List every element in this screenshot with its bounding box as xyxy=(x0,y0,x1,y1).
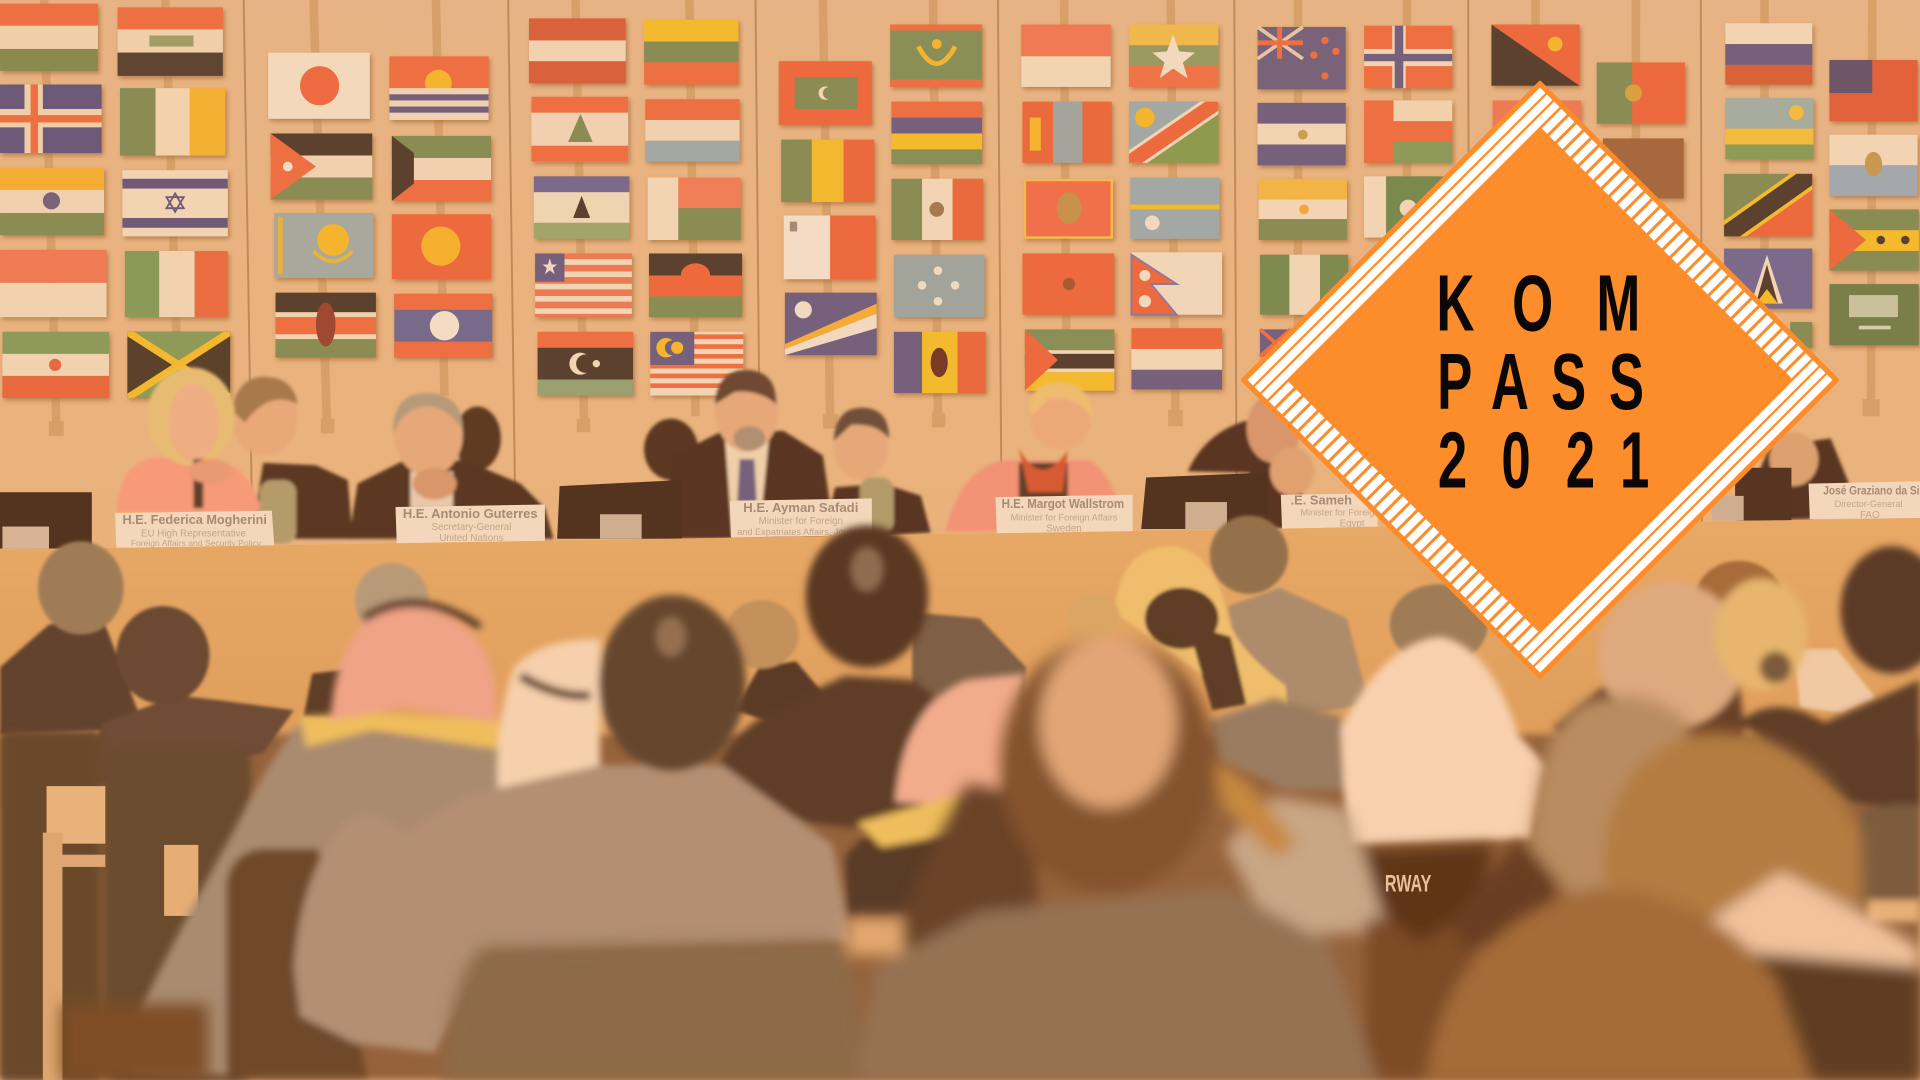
title line: KOM: KOM xyxy=(1436,260,1640,348)
flag: Iran xyxy=(2,332,109,398)
flag: Latvia style xyxy=(529,18,626,83)
panelist: Federica Mogherini xyxy=(116,367,262,512)
flag: Russia style xyxy=(1725,23,1812,84)
nameplate: Jose Graziano da Silva: Director-General xyxy=(1835,499,1902,509)
flag: Mongolia xyxy=(1022,102,1112,163)
flag: Israel xyxy=(122,170,228,236)
badge: KOMPASS 2021 diamond xyxy=(1240,80,1840,680)
flag: New Zealand xyxy=(1258,27,1346,89)
attendee: grey hair covered man xyxy=(1390,584,1488,665)
attendee: dark coat xyxy=(1751,953,1920,1080)
flag: Portugal xyxy=(1597,62,1685,124)
flag: Italy xyxy=(125,251,228,317)
flag: Iceland xyxy=(0,84,102,153)
flag: Marshall Islands xyxy=(785,293,877,355)
nameplate: Antonio Guterres: Secretary-General xyxy=(431,522,511,533)
attendee: red-brown hair xyxy=(1604,732,1864,918)
nameplate: Margot Wallstrom: Sweden xyxy=(1046,523,1082,534)
attendee: white robed figure xyxy=(1341,637,1545,845)
attendee: sweater back xyxy=(1206,698,1353,790)
flag: Japan xyxy=(268,53,370,119)
monitor left xyxy=(0,492,92,549)
attendee: long brown hair xyxy=(1212,759,1298,857)
flag: Kyrgyzstan xyxy=(392,214,491,279)
nameplate: Antonio Guterres: United Nations xyxy=(439,533,504,544)
attendee: second keffiyeh xyxy=(895,673,1026,808)
long stripes south-east side xyxy=(1520,360,1832,672)
monitor right xyxy=(1141,473,1267,529)
flag: Papua New Guinea xyxy=(1491,24,1580,86)
flag: Saudi Arabia xyxy=(1829,284,1919,345)
flag: Morocco xyxy=(1022,253,1114,315)
flag: Moldova xyxy=(894,332,986,393)
attendee: Norway sign xyxy=(1363,845,1494,943)
attendee: blurred foreground head xyxy=(1427,888,1812,1080)
long stripes north-west side xyxy=(1248,88,1560,400)
badge title xyxy=(1436,260,1649,505)
nameplate: Federica Mogherini xyxy=(115,511,274,549)
panelist: woman behind Safadi xyxy=(644,419,698,480)
flag: Micronesia xyxy=(894,255,984,317)
chair left xyxy=(0,731,100,1080)
attendee: white collar xyxy=(1708,872,1920,970)
flag: Kazakhstan xyxy=(274,213,373,278)
attendee: dark suit centre xyxy=(714,525,961,833)
attendee: bald man in foreground xyxy=(857,637,1378,1080)
flag: Nepal xyxy=(1131,252,1222,315)
water pitchers xyxy=(260,478,894,544)
flag: Monaco xyxy=(1021,24,1111,87)
audience: seat backs xyxy=(0,731,251,1080)
nameplate: Ayman Safadi: and Expatriates Affairs, Jordan xyxy=(737,527,862,537)
flag: Kiribati xyxy=(389,56,489,120)
computer monitors xyxy=(0,468,1791,549)
attendee: woman with hair clip xyxy=(1145,588,1247,710)
lower background behind audience xyxy=(0,735,1920,1080)
flag: Madagascar xyxy=(648,178,741,240)
attendee: small blonde left xyxy=(1067,594,1120,643)
attendee: grey robe with keffiyeh xyxy=(116,713,500,1075)
flag: Libya xyxy=(538,332,633,396)
flag: Maldives xyxy=(779,61,872,125)
flags wall xyxy=(0,4,1919,398)
attendee: dark hair left of bald man xyxy=(888,784,1041,949)
dark gap right of bald man xyxy=(1365,918,1476,1080)
hatch stripes south-west side xyxy=(1279,392,1530,643)
flag: India xyxy=(0,168,104,235)
attendee: man in tan jacket xyxy=(294,595,851,1053)
flag: Laos xyxy=(394,294,492,358)
flag: Mozambique xyxy=(1025,329,1114,391)
flag: Nigeria xyxy=(1260,255,1348,315)
flag: Indonesia xyxy=(0,250,107,317)
title line: PASS: PASS xyxy=(1437,338,1644,427)
attendee: striped suit xyxy=(73,606,294,784)
flag: Lebanon xyxy=(531,97,628,162)
audience: far row xyxy=(0,516,1876,784)
flag: Lesotho xyxy=(534,176,629,239)
attendee: white headdress xyxy=(497,639,600,802)
flag: partial Union design xyxy=(1260,329,1291,356)
attendee: striped white shirt far right xyxy=(1794,649,1876,713)
flag: Qatar xyxy=(1603,138,1684,198)
chair second xyxy=(104,749,251,1080)
flag: Niger xyxy=(1259,179,1347,240)
nameplate: Sameh Shoukry: Minister for Foreign xyxy=(1300,508,1379,518)
flag: Luxembourg xyxy=(645,99,740,162)
attendee: red checked keffiyeh xyxy=(331,604,497,722)
right seat back xyxy=(1855,804,1920,900)
panelist: man with glasses xyxy=(231,377,353,539)
panelist: aide behind Guterres xyxy=(454,407,501,470)
flag: Malawi xyxy=(649,253,742,317)
flag: Malta xyxy=(784,216,876,279)
flag: Saint Lucia xyxy=(1724,249,1812,309)
badge inner orange field xyxy=(1287,127,1793,633)
nameplate: Margot Wallstrom xyxy=(996,495,1133,534)
right desk edge xyxy=(1867,900,1920,922)
flag: Mauritius xyxy=(891,102,982,164)
bottom left shadow xyxy=(61,1004,208,1080)
nameplate: Jose Graziano da Silva: FAO xyxy=(1860,510,1880,521)
nameplate: Ayman Safadi xyxy=(730,498,872,538)
panelist: man at right covered by badge xyxy=(1188,394,1335,529)
sign lettering: RWAY xyxy=(1385,870,1431,897)
nameplate: Sameh Shoukry xyxy=(1281,492,1379,530)
nameplate: Ayman Safadi: H.E. Ayman Safadi xyxy=(743,500,858,515)
flag: Kenya xyxy=(276,293,376,358)
flag: Pakistan xyxy=(1364,176,1460,238)
panelist: Antonio Guterres xyxy=(349,393,553,539)
audience: near row xyxy=(61,637,1920,1080)
nameplate: Sameh Shoukry: Egypt xyxy=(1340,519,1365,530)
attendee: fair hair man xyxy=(1531,695,1690,906)
flag: San Marino xyxy=(1829,135,1918,196)
nameplate: Federica Mogherini: Foreign Affairs and Security Policy xyxy=(131,538,262,548)
panelist: aide right of Safadi xyxy=(823,408,931,539)
nameplate: Federica Mogherini: H.E. Federica Mogherini xyxy=(122,512,267,527)
flag: Malaysia xyxy=(650,332,743,396)
flag: Mexico xyxy=(891,179,983,240)
nameplate: Margot Wallstrom: Minister for Foreign Affairs xyxy=(1011,512,1118,522)
flag: Sao Tome xyxy=(1829,209,1919,271)
flag: Ireland xyxy=(120,88,225,156)
dais desk front xyxy=(0,518,1920,808)
audience: mid row xyxy=(116,525,1920,1078)
flag: Mali xyxy=(781,140,874,202)
flag: Netherlands xyxy=(1131,328,1222,389)
attendee: small blond head xyxy=(725,600,833,735)
seat back centre xyxy=(441,940,863,1080)
flag: partial olive xyxy=(1790,322,1812,348)
flag: Liberia xyxy=(535,253,632,317)
desk strips left xyxy=(43,786,198,1080)
nameplate: Antonio Guterres: H.E. Antonio Guterres xyxy=(403,506,538,521)
flag: red cream olive xyxy=(0,4,98,71)
flag: Rwanda xyxy=(1725,98,1813,159)
flag: Namibia xyxy=(1129,102,1218,163)
nameplate: Ayman Safadi: Minister for Foreign xyxy=(759,516,843,527)
panelists on dais xyxy=(116,367,1849,544)
chair dark under hand xyxy=(227,849,367,1078)
attendee: robe with yellow collar, dark xyxy=(845,793,980,916)
flag: partial red behind badge xyxy=(1493,100,1581,149)
attendee: dark jacket xyxy=(1451,839,1555,949)
flag: Samoa xyxy=(1829,60,1918,121)
flag poles xyxy=(44,0,1880,436)
flag: Kuwait xyxy=(392,136,491,201)
flag: Jamaica xyxy=(127,332,230,398)
nameplate: Antonio Guterres xyxy=(396,504,545,544)
nameplate: Margot Wallstrom: H.E. Margot Wallstrom xyxy=(1002,496,1124,511)
small desk piece xyxy=(847,918,902,955)
title line: 2021: 2021 xyxy=(1438,417,1649,505)
flag: Jordan xyxy=(271,133,372,200)
wall xyxy=(0,0,1920,563)
flag: Nauru xyxy=(1130,178,1220,239)
monitor far right xyxy=(1712,468,1791,520)
attendee: checked jacket xyxy=(1224,796,1390,937)
panelist: Ayman Safadi xyxy=(661,369,835,539)
attendee: suit far left xyxy=(0,541,144,735)
attendee: dark hair far right xyxy=(1739,546,1920,811)
flag: Myanmar xyxy=(1129,24,1218,87)
nameplate: Federica Mogherini: EU High Representative xyxy=(141,528,246,539)
flag: Montenegro xyxy=(1024,179,1113,239)
attendee: grey suit right of centre xyxy=(1210,516,1369,716)
flag: Saint Kitts xyxy=(1724,174,1812,236)
attendee: blonde with bun xyxy=(1714,578,1807,691)
hatch stripes north-east side xyxy=(1552,119,1803,370)
attendee: grey hair centre left xyxy=(304,563,429,722)
monitor centre xyxy=(557,480,682,539)
attendee: grey suit behind xyxy=(912,612,1026,708)
flag: Norway xyxy=(1364,26,1452,88)
badge outer orange border and stripes xyxy=(1240,80,1840,680)
panelist: man at far right xyxy=(1739,432,1849,520)
flag: Nicaragua xyxy=(1258,103,1346,165)
nameplate: Sameh Shoukry: .E. Sameh xyxy=(1291,492,1352,507)
flag: Iraq xyxy=(118,7,223,76)
attendee: blonde xyxy=(1114,546,1288,716)
flag: Oman xyxy=(1364,100,1452,163)
attendee: bald man right xyxy=(1553,582,1745,808)
nameplate: Jose Graziano da Silva xyxy=(1809,481,1920,521)
attendee: brown hair far right xyxy=(1695,561,1783,639)
panelist: Margot Wallstrom xyxy=(945,382,1124,531)
flag: Mauritania xyxy=(890,24,982,87)
flag: Lithuania style xyxy=(644,20,738,84)
